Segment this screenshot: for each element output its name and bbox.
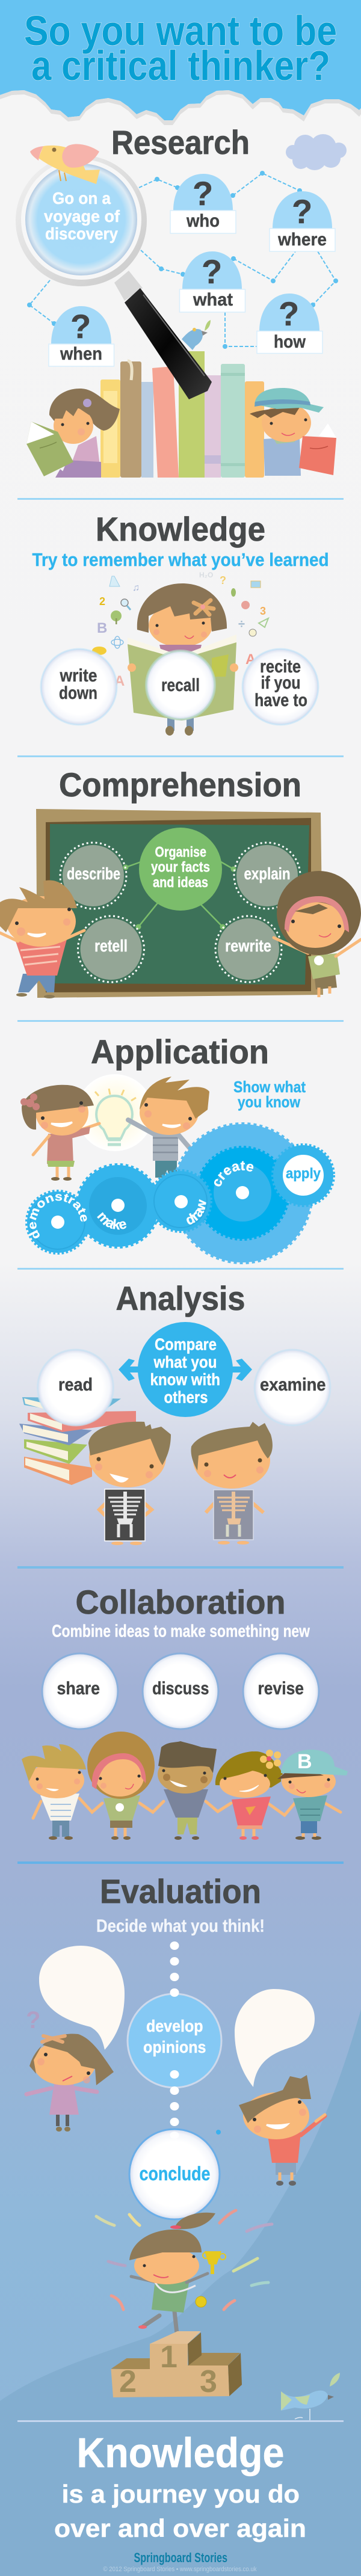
icon: small blue bird (182, 320, 211, 350)
gear: apply: apply (286, 1166, 321, 1182)
idea: describe: describe (67, 864, 120, 883)
bubble: write down: down (59, 683, 97, 703)
speech bubble: left (39, 1946, 125, 2050)
lens text (44, 189, 120, 243)
connecting dots (170, 1941, 179, 2139)
centre idea: your facts (151, 859, 210, 876)
question: where (270, 191, 335, 251)
bubble: conclude (129, 2129, 220, 2219)
icon: small cloud (286, 134, 347, 170)
section divider (17, 1020, 344, 1022)
illustration: winner girl (129, 2213, 226, 2337)
closing message: is a journey you do (61, 2480, 300, 2508)
illustration: girl pointing at board (274, 871, 361, 997)
lightbulb (76, 1074, 153, 1151)
question: what: what (193, 290, 233, 310)
arrows (119, 1359, 252, 1381)
brand: Springboard Stories (134, 2550, 227, 2565)
bubble: write down: write (60, 666, 97, 686)
icon: bird with leaf (281, 2373, 340, 2421)
lens text: voyage of (44, 207, 120, 226)
bubble: examine (255, 1350, 330, 1425)
question: when: when (60, 344, 102, 364)
podium: 1 (160, 2340, 177, 2375)
gear: draw (153, 1169, 212, 1233)
bubble: revise: revise (258, 1679, 304, 1698)
connectors (123, 860, 236, 930)
question: how: how (274, 332, 306, 352)
bubble: share: share (57, 1679, 100, 1698)
heading: Research: Research (111, 123, 250, 161)
gear: large background with create (176, 1122, 313, 1264)
question: where: where (277, 230, 327, 250)
bubble: write down (41, 649, 117, 725)
podium: 3 (200, 2364, 217, 2399)
heading: Application: Application (91, 1033, 269, 1071)
icon: yellow bird (30, 144, 100, 184)
bubble: recall: recall (161, 675, 200, 695)
illustration: five kids holding hands (22, 1732, 348, 1840)
central bubble: compare: others (164, 1388, 208, 1406)
heading: Knowledge: Knowledge (96, 510, 265, 548)
lens text: Go on a (52, 189, 111, 207)
subheading: knowledge: Try to remember what you’ve learned (32, 549, 329, 570)
illustration: boy holding bulb (128, 1077, 209, 1178)
confetti (96, 2210, 272, 2310)
illustration: puzzled girl (26, 2007, 114, 2132)
bubble: recite if you have to: if you (261, 673, 301, 693)
illustration: boy reading (250, 388, 336, 476)
speech bubble: right (235, 1989, 315, 2087)
bubble: revise (243, 1653, 319, 1729)
floating knowledge icons: A (114, 673, 125, 689)
bubble: conclude: conclude (140, 2163, 211, 2184)
closing message: Knowledge (77, 2429, 284, 2476)
gear: apply (273, 1145, 333, 1205)
floating knowledge icons: 3 (260, 605, 266, 617)
gear: make (76, 1163, 158, 1249)
section divider (17, 1566, 344, 1569)
section divider (17, 2420, 344, 2422)
bubble: examine: examine (260, 1375, 326, 1395)
illustration: boy behind x-ray (191, 1422, 273, 1545)
floating knowledge icons: 2 (99, 595, 105, 607)
stack of books (19, 1397, 136, 1485)
subheading: evaluation: Decide what you think! (96, 1916, 265, 1936)
kid two (87, 1732, 155, 1840)
bubble: share (42, 1653, 118, 1729)
illustration: girl holding bulb (20, 1085, 99, 1181)
bubble: discuss: discuss (152, 1679, 209, 1698)
bubble: discuss (143, 1653, 218, 1729)
kid five: B (297, 1750, 312, 1773)
question: what: ? (202, 253, 222, 290)
arms (33, 1798, 341, 1818)
question: how (257, 294, 322, 354)
lower right hill (0, 2009, 361, 2576)
section divider (17, 1861, 344, 1864)
central bubble: compare: Compare (155, 1335, 217, 1353)
row of books (100, 351, 264, 478)
gear: draw: draw (187, 1199, 206, 1225)
idea: explain (234, 843, 300, 909)
floating knowledge icons (92, 571, 268, 689)
question: where: ? (292, 192, 312, 230)
heading: Collaboration: Collaboration (76, 1583, 285, 1621)
idea: describe (60, 843, 126, 909)
section divider (17, 1268, 344, 1270)
bubble: recite if you have to (242, 649, 318, 725)
illustration: boy pointing at board (0, 880, 84, 998)
bubble: read (37, 1350, 113, 1425)
centre idea: Organise (155, 844, 206, 860)
subheading: application: Show what (233, 1078, 306, 1096)
floating knowledge icons: A (245, 651, 256, 668)
question: when: ? (70, 307, 91, 345)
floating knowledge icons: H₂O (199, 571, 213, 579)
question: who (170, 174, 236, 233)
bubble: recite if you have to: have to (255, 690, 307, 710)
kid one (22, 1744, 86, 1840)
subheading: application (233, 1078, 306, 1111)
closing message (54, 2429, 306, 2542)
small blue dot (216, 2130, 221, 2135)
chalkboard (36, 809, 323, 998)
idea: retell: retell (94, 936, 128, 955)
bubble: read: read (58, 1375, 93, 1395)
header banner (0, 0, 361, 125)
section divider (17, 498, 344, 500)
heading: Evaluation: Evaluation (100, 1872, 261, 1910)
bubble: develop opinions: develop (146, 2017, 203, 2035)
question: when (49, 306, 114, 366)
question: who: who (186, 211, 220, 231)
floating knowledge icons: B (97, 620, 107, 636)
illustration: boy with x-ray (88, 1422, 171, 1545)
closing message: over and over again (54, 2514, 306, 2542)
centre idea: and ideas (153, 875, 208, 891)
central bubble: compare (138, 1322, 233, 1417)
kid three (158, 1741, 217, 1840)
kid four (215, 1750, 283, 1840)
question network lines (27, 171, 338, 349)
idea: explain: explain (244, 864, 290, 883)
central bubble: compare: know with (150, 1370, 220, 1389)
idea: retell (78, 916, 144, 982)
idea: rewrite: rewrite (225, 936, 271, 955)
illustration: girl with book (128, 583, 238, 736)
illustration: pointing boy (239, 2075, 325, 2186)
floating knowledge icons: ♫ (132, 583, 140, 593)
gear: make: make (97, 1213, 126, 1229)
illustration: girl reading (26, 389, 120, 478)
illustration: puzzled girl: ? (26, 2007, 40, 2033)
lens text: discovery (45, 224, 118, 243)
podium: 2 (119, 2364, 137, 2399)
subheading: application: you know (238, 1093, 301, 1111)
magnifying glass (16, 155, 212, 399)
gear: demonstrate: demonstrate (29, 1193, 87, 1238)
bubble: recite if you have to: recite (260, 657, 301, 677)
kid five (277, 1750, 348, 1840)
title (24, 7, 337, 89)
heading: Analysis: Analysis (116, 1279, 245, 1317)
bubble: develop opinions: opinions (143, 2038, 206, 2056)
question: how: ? (279, 295, 299, 333)
central bubble: compare: what you (153, 1353, 217, 1371)
floating knowledge icons: ÷ (238, 618, 245, 631)
idea: rewrite (215, 916, 282, 982)
question: who: ? (193, 174, 213, 212)
podium (111, 2331, 242, 2399)
centre idea (139, 828, 222, 911)
copyright: © 2012 Springboard Stories • www.springboardstories.co.uk (103, 2566, 257, 2573)
question: what (179, 251, 245, 312)
bubble: recall (146, 651, 215, 719)
bubble: develop opinions (128, 1994, 221, 2088)
gear: large background with create: create (214, 1161, 254, 1187)
floating knowledge icons: ? (220, 574, 226, 586)
section divider (17, 755, 344, 757)
heading: Comprehension: Comprehension (59, 766, 301, 804)
